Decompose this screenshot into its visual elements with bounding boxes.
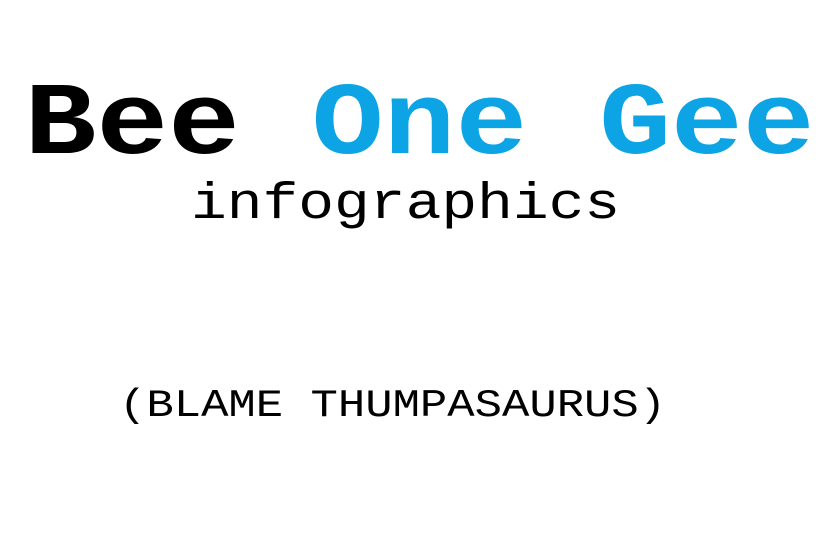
subtitle: infographics: infographics xyxy=(191,176,620,234)
caption: blame thumpasaurus: (BLAME THUMPASAURUS) xyxy=(119,384,666,428)
title: Bee One Gee: Bee One Gee xyxy=(24,67,815,184)
